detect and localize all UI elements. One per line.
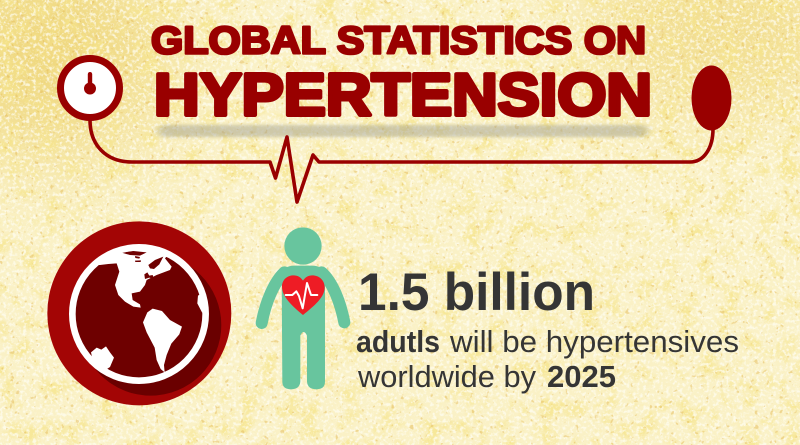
blood pressure tube with heartbeat line [90, 120, 713, 202]
icon: pump bulb [692, 66, 732, 130]
globe dark details [122, 251, 163, 279]
heart with pulse [282, 275, 325, 315]
person body [262, 266, 344, 389]
description line 1 continued: will be hypertensives [449, 325, 739, 359]
person head [284, 227, 322, 265]
globe interior [74, 249, 204, 379]
globe icon [47, 221, 231, 405]
description line 1: adutls [356, 325, 440, 359]
description line 2: worldwide by [357, 360, 537, 394]
title shadow [158, 125, 648, 137]
globe long shadow [80, 254, 221, 396]
person icon [262, 227, 344, 389]
globe white ring [72, 247, 206, 381]
headline number: 1.5 billion [358, 263, 595, 322]
description line 2 year: 2025 [547, 360, 616, 394]
title [151, 20, 652, 128]
icon: pressure gauge [60, 58, 120, 118]
statistic text [356, 263, 739, 394]
title line 1: GLOBAL STATISTICS ON [151, 20, 646, 62]
continents [91, 250, 202, 372]
title line 2: HYPERTENSION [154, 61, 652, 128]
